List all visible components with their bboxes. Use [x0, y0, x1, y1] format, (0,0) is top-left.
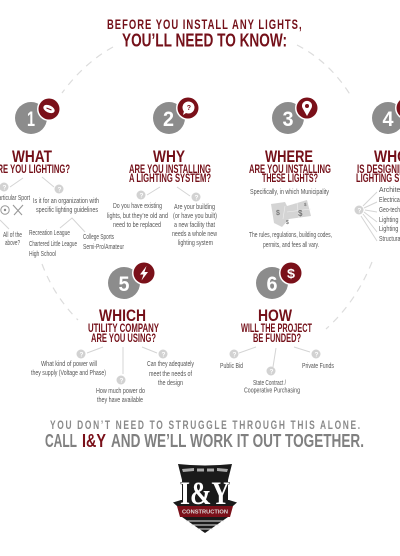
- heading: THESE LIGHTS?: [262, 173, 318, 185]
- heading: BE FUNDED?: [253, 333, 301, 345]
- step badge 3: 3: [282, 108, 294, 131]
- panel: why: [107, 96, 217, 247]
- heading: WHICH: [99, 306, 146, 325]
- connectors and markers: ?: [314, 352, 318, 358]
- option text: State Contract /: [253, 378, 287, 387]
- connectors and markers: [136, 187, 200, 202]
- connectors and markers: ?: [162, 352, 166, 358]
- logo: I&Y Construction: [173, 464, 237, 533]
- heading: WHERE: [265, 147, 313, 166]
- heading: WILL THE PROJECT: [241, 323, 312, 335]
- step badge 2: 2: [163, 108, 174, 131]
- connectors and markers: [0, 177, 85, 232]
- panel: how: [220, 261, 334, 394]
- connectors and markers: ?: [140, 192, 144, 200]
- text: rules: permits, and fees all vary.: [263, 240, 319, 249]
- step badge 2: ?: [187, 105, 191, 112]
- heading: [129, 147, 211, 185]
- option text: meet the needs of: [149, 369, 193, 378]
- title: [107, 17, 302, 50]
- option text: lighting system: [178, 238, 213, 247]
- option text: Can they adequately: [147, 359, 194, 368]
- step badge 2: [153, 96, 200, 134]
- map of municipalities: [271, 200, 311, 227]
- text: rules: [249, 230, 332, 249]
- connectors and markers: [76, 347, 168, 384]
- icons: soccer ball and crossed bats: [1, 205, 23, 215]
- step badge 1: 1: [27, 108, 35, 131]
- option text: High School: [29, 249, 56, 258]
- panel: where: [249, 96, 332, 249]
- heading: [88, 306, 159, 345]
- connectors and markers: ?: [232, 352, 236, 358]
- option text: Recreation League: [29, 228, 70, 237]
- option text: [0, 193, 124, 258]
- title: BEFORE YOU INSTALL ANY LIGHTS,: [107, 17, 302, 32]
- heading: [241, 306, 312, 345]
- connectors and markers: ?: [58, 186, 62, 194]
- heading: ARE YOU USING?: [91, 333, 156, 345]
- heading: A LIGHTING SYSTEM?: [129, 173, 211, 185]
- map of municipalities: $: [304, 202, 307, 207]
- option text: [220, 361, 334, 394]
- heading: [249, 147, 331, 185]
- option text: specific lighting guidelines: [36, 205, 98, 214]
- step badge 6: 6: [266, 273, 278, 296]
- connectors and markers: ?: [194, 194, 198, 202]
- closing message: YOU DON’T NEED TO STRUGGLE THROUGH THIS ALONE.: [50, 420, 360, 432]
- option text: Is it for an organization with: [33, 196, 99, 205]
- map of municipalities: $: [298, 209, 303, 218]
- option text: Public Bid: [220, 361, 243, 370]
- logo: I&Y Construction: I&Y: [180, 476, 230, 512]
- closing message: [45, 420, 364, 451]
- heading: ARE YOU INSTALLING: [249, 164, 331, 176]
- option text: needs a whole new: [172, 229, 217, 238]
- option text: [107, 201, 217, 247]
- map of municipalities: $: [286, 220, 289, 226]
- closing message: I&Y: [82, 430, 107, 451]
- option text: [31, 359, 194, 404]
- heading: HOW: [258, 306, 293, 325]
- option text: College Sports: [83, 232, 114, 241]
- option text: How much power do: [96, 386, 145, 395]
- option text: Do you have existing: [113, 201, 162, 210]
- text: rules: The rules, regulations, building codes,: [249, 230, 332, 239]
- connectors and marker: ?: [358, 208, 362, 214]
- map of municipalities: $: [276, 210, 280, 217]
- option text: a new facility that: [174, 220, 216, 229]
- connectors and markers: ?: [120, 378, 124, 384]
- step badge 1: [15, 97, 61, 134]
- option text: Private Funds: [302, 361, 334, 370]
- connectors and markers: ?: [2, 184, 6, 192]
- list of designers: [379, 185, 400, 243]
- heading: ARE YOU INSTALLING: [129, 164, 211, 176]
- heading: WHAT: [12, 147, 52, 166]
- step badge 6: [256, 261, 303, 299]
- option text: What kind of power will: [41, 359, 97, 368]
- panel: what: [0, 97, 124, 258]
- panel: who: [354, 96, 400, 243]
- step badge 4: 4: [382, 108, 394, 131]
- step badge 4: [372, 96, 400, 134]
- step badge 6: $: [287, 266, 296, 281]
- option text: (or have you built): [173, 211, 217, 220]
- text: municipality: Specifically, in which Municipality: [250, 187, 329, 196]
- connectors and markers: [230, 347, 320, 376]
- option text: All of the: [3, 230, 22, 239]
- heading: UTILITY COMPANY: [88, 323, 159, 335]
- heading: [0, 147, 70, 176]
- option text: Cooperative Purchasing: [244, 386, 300, 394]
- option text: the design: [158, 378, 183, 387]
- connectors and markers: ?: [270, 368, 274, 376]
- option text: Semi-Pro/Amateur: [83, 242, 124, 251]
- option text: lights, but they’re old and: [107, 211, 168, 220]
- option text: Are your building: [174, 202, 215, 211]
- closing message: CALL: [45, 430, 77, 451]
- dashed connecting circle: [42, 45, 372, 329]
- option text: above?: [5, 238, 20, 247]
- logo: I&Y Construction: CONSTRUCTION: [182, 510, 228, 516]
- step badge 5: [108, 261, 156, 299]
- option text: Chartered Little League: [29, 239, 77, 248]
- heading: WHY: [153, 147, 186, 166]
- step badge 3: [272, 96, 319, 134]
- connectors and markers: ?: [80, 352, 84, 358]
- panel: which: [31, 261, 194, 404]
- option text: they have available: [97, 395, 143, 404]
- heading: [356, 147, 400, 185]
- option text: need to be replaced: [113, 220, 161, 229]
- option text: they supply (Voltage and Phase): [31, 368, 106, 377]
- step badge 5: 5: [118, 273, 130, 296]
- connectors and marker: [354, 192, 377, 241]
- title: YOU’LL NEED TO KNOW:: [122, 30, 287, 50]
